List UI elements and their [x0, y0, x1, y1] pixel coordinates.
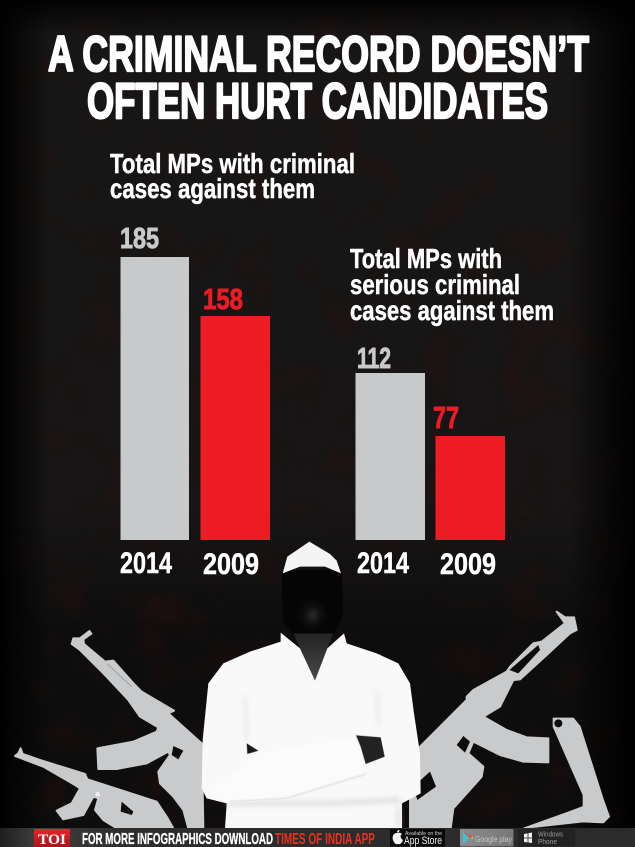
badge: Windows Phone: Phone — [538, 839, 557, 846]
bar: 2014 value 112: 112 — [357, 343, 391, 375]
heading: total MPs with serious criminal cases — [350, 243, 554, 326]
bar: 2014 value 112 — [356, 343, 425, 580]
head — [282, 570, 343, 638]
badge: Google play: Google play — [475, 834, 513, 844]
kurta shading — [227, 690, 400, 827]
neck — [293, 633, 333, 682]
heading: total MPs with serious criminal cases: serious criminal — [350, 269, 520, 300]
icon: rifle right — [410, 612, 609, 828]
badge: Windows Phone: Windows — [538, 832, 563, 838]
footer bar — [0, 828, 635, 847]
bar: 2009 value 77: 2009 — [440, 548, 496, 581]
logo: TOI — [34, 829, 70, 847]
cap — [283, 542, 341, 573]
bar: 2014 value 112: 2014 — [357, 547, 409, 580]
bar chart: total MPs with criminal cases — [120, 223, 270, 581]
bar: 2009 value 158: 158 — [203, 284, 243, 316]
kurta — [202, 633, 421, 828]
heading: total MPs with criminal cases — [110, 148, 355, 204]
bar: 2009 value 77 — [433, 400, 505, 581]
bar: 2014 value 185 — [120, 223, 189, 580]
heading: total MPs with criminal cases: Total MPs with criminal — [110, 148, 355, 179]
bar: 2014 value 185: 185 — [120, 223, 159, 255]
badge: Google play — [460, 829, 514, 846]
bar: 2009 value 158: 2009 — [203, 548, 259, 581]
heading: total MPs with serious criminal cases: Total MPs with — [350, 243, 502, 274]
forearm edge shading — [230, 774, 366, 802]
hand — [356, 735, 385, 764]
heading: total MPs with criminal cases: cases against them — [110, 173, 315, 204]
bar: 2009 value 77: 77 — [433, 400, 459, 435]
bar: 2014 value 185: 2014 — [120, 547, 172, 580]
title — [48, 26, 589, 129]
man in white kurta and cap — [202, 542, 421, 828]
icon: rifle lower left — [15, 748, 173, 828]
bar: 2009 value 158 — [200, 284, 270, 581]
badge: App Store: Available on the — [405, 831, 442, 837]
badge: App Store: App Store — [404, 835, 442, 847]
shadow under arm — [247, 743, 258, 754]
badge: App Store — [390, 829, 445, 847]
heading: total MPs with serious criminal cases: cases against them — [350, 295, 554, 326]
badge: Windows Phone — [518, 829, 575, 846]
icon: rifle upper left — [72, 631, 203, 828]
bar chart: total MPs with serious criminal cases — [356, 343, 505, 581]
crossed forearm — [210, 737, 366, 803]
